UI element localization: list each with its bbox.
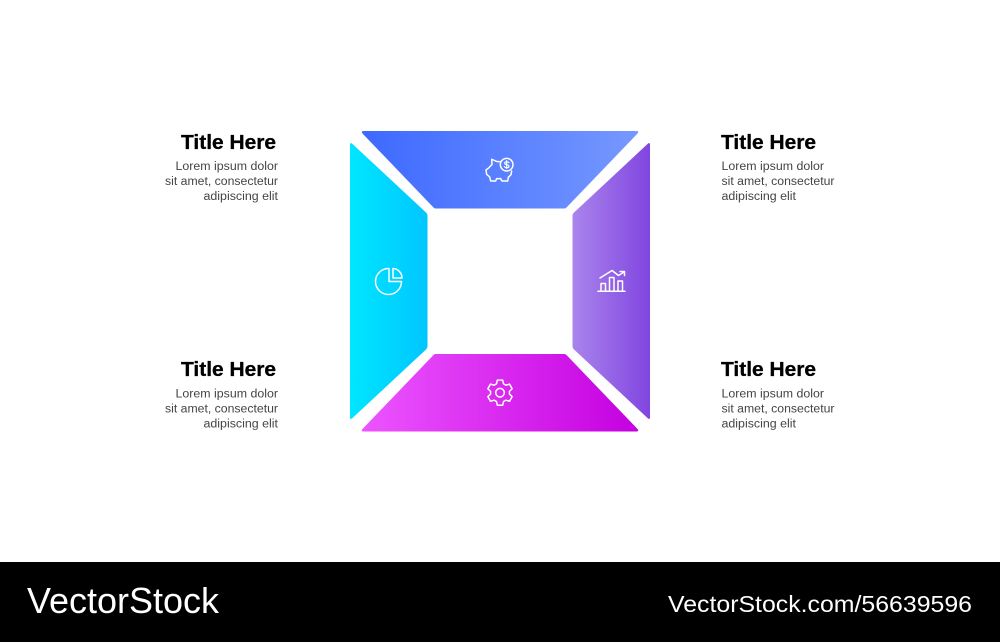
text block: bottom left	[165, 359, 279, 430]
footer bar	[0, 562, 1000, 642]
text block: bottom left: Lorem ipsum dolor	[176, 388, 278, 400]
text block: top right: adipiscing elit	[722, 191, 797, 203]
footer url: VectorStock.com/56639596	[668, 591, 972, 617]
icon: bar chart with trend arrow	[598, 270, 625, 291]
text block: bottom right: Lorem ipsum dolor	[722, 388, 824, 400]
text block: bottom left: sit amet, consectetur	[165, 404, 278, 416]
footer logo: VectorStock	[27, 580, 220, 621]
text block: top left: adipiscing elit	[204, 191, 279, 203]
text block: bottom right: Title Here	[721, 359, 816, 381]
text block: bottom left: adipiscing elit	[204, 418, 279, 430]
text block: top left	[165, 132, 279, 203]
icon: piggy bank	[486, 158, 513, 181]
text block: bottom right	[721, 359, 835, 430]
text block: top right: Lorem ipsum dolor	[722, 161, 824, 173]
text block: bottom left: Title Here	[181, 359, 276, 381]
panel: right trapezoid	[572, 143, 650, 419]
text block: bottom right: adipiscing elit	[722, 418, 797, 430]
text block: top right: Title Here	[721, 132, 816, 154]
panel: left trapezoid	[350, 143, 428, 419]
panel: bottom trapezoid	[362, 354, 638, 432]
icon: pie chart	[376, 268, 402, 294]
text block: top right: sit amet, consectetur	[722, 176, 835, 188]
text block: bottom right: sit amet, consectetur	[722, 404, 835, 416]
text block: top right	[721, 132, 835, 203]
text block: top left: sit amet, consectetur	[165, 176, 278, 188]
icon: gear	[488, 380, 512, 405]
text block: top left: Title Here	[181, 132, 276, 154]
text block: top left: Lorem ipsum dolor	[176, 161, 278, 173]
panel: top trapezoid	[362, 131, 638, 208]
